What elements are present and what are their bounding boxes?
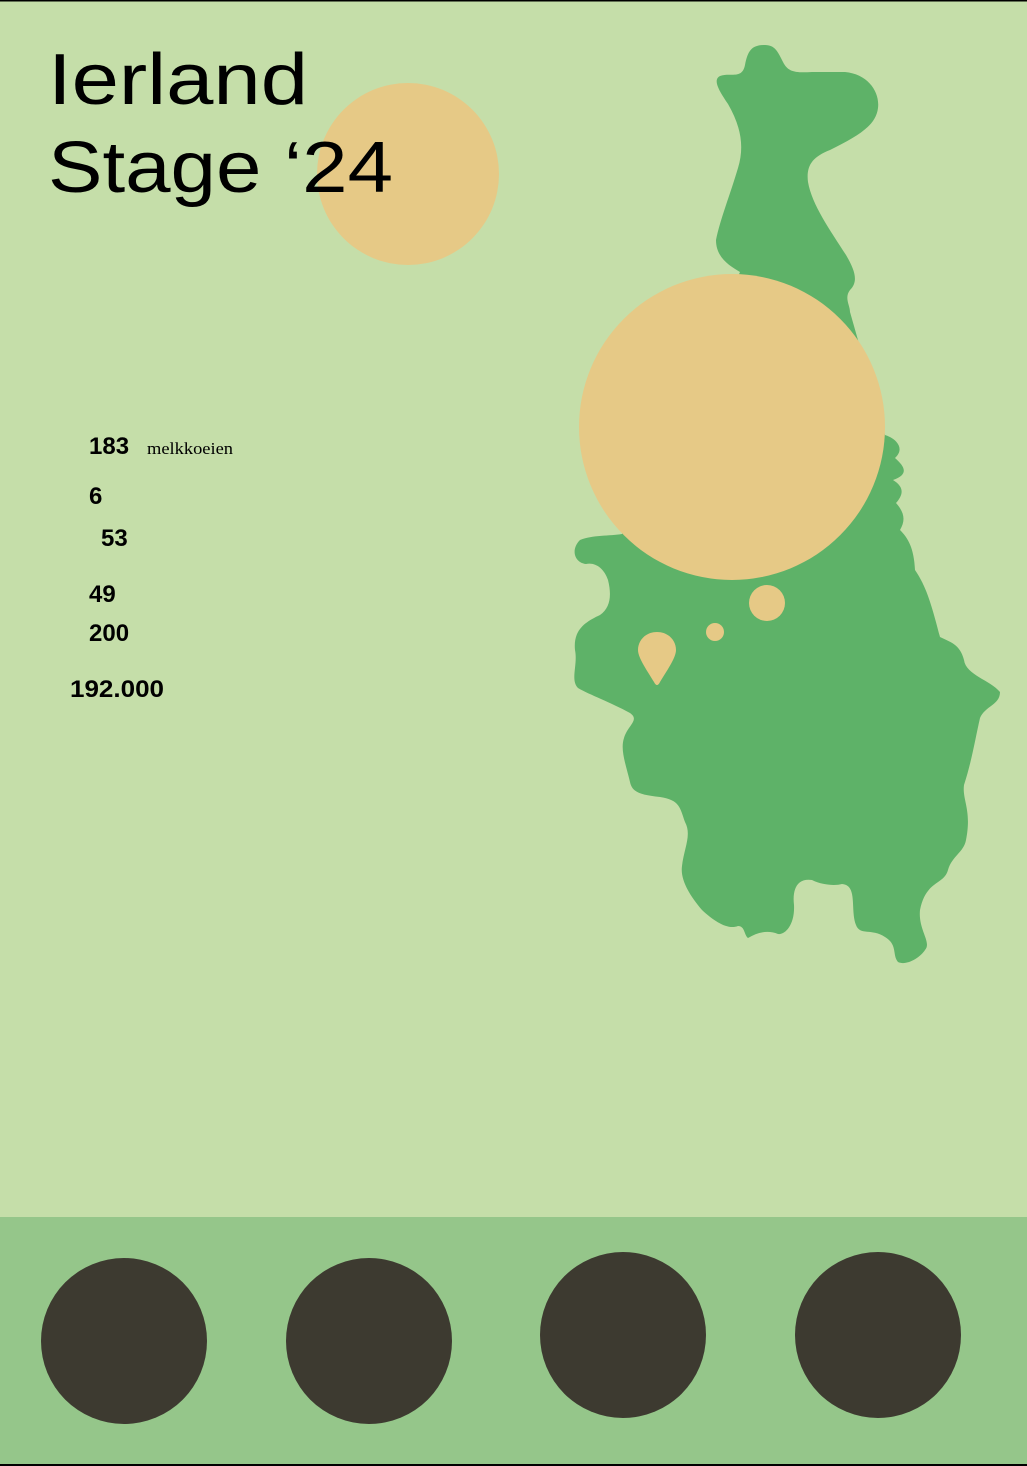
circle: title highlight	[317, 83, 499, 265]
title: Ierland	[48, 40, 308, 120]
stats list: 192.000	[70, 676, 164, 703]
title: Stage ‘24	[48, 128, 393, 208]
bottom band	[0, 1217, 1027, 1464]
stats list: 183	[89, 433, 129, 460]
stats list: 6	[89, 483, 102, 510]
bottom circles	[41, 1252, 961, 1424]
stats list: 53	[101, 525, 128, 552]
stats list: 49	[89, 581, 116, 608]
stats list: 200	[89, 620, 129, 647]
icon: location pin	[638, 632, 676, 685]
title	[48, 40, 393, 208]
label: melkkoeien: melkkoeien	[147, 439, 234, 458]
dot: medium	[749, 585, 785, 621]
circle: large highlight on map	[579, 274, 885, 580]
map: Ireland	[574, 45, 1000, 963]
dot: small	[706, 623, 724, 641]
stats list	[70, 433, 164, 703]
